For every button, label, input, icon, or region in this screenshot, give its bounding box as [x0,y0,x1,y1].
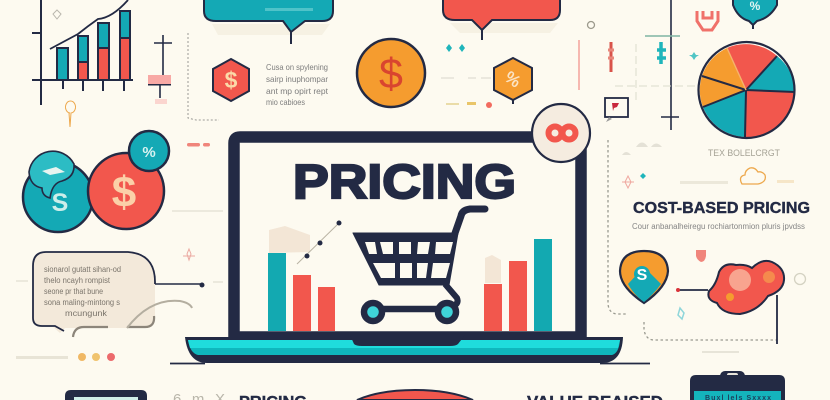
red ellipse: bottom centre [357,390,473,400]
speech bubble: red top [443,0,560,40]
status dots [16,211,223,361]
icon: orange dollar coin [357,39,425,107]
speech note: left panel: sionarol gutatt sihan-od [44,265,121,274]
icon: teal speech circle with dollar [23,151,93,232]
decorative sparkles and dashes near top centre [187,44,492,146]
text block: hexagon caption [266,62,329,107]
icon: cloud [740,168,765,184]
icon: red hexagon dollar: $ [225,67,238,93]
icon: red hexagon dollar [213,59,249,101]
badge: round corner icon [532,104,590,162]
decorative: drop, ring and sparkle [678,250,806,353]
dashed guide near top left [188,33,219,120]
icon: red circle with dollar: $ [112,168,136,217]
icon: orange dollar coin: $ [379,50,403,98]
speech pin: top right teal [733,0,777,29]
text block: hexagon caption: mio cabioes [266,97,305,107]
laptop screen [234,137,581,337]
icon: teal speech circle with dollar: S [52,189,68,217]
pie chart [698,42,795,138]
icon: red blob with connector [676,261,784,344]
icon: small sparkle and bulb [53,10,76,127]
decorative: clouds and sparkles [622,142,794,188]
speech note: left panel: sona maling-mintong s [44,298,120,307]
icon: small teal circle [129,131,169,171]
clipboard: bottom right [690,371,785,400]
icon: orange hexagon percent [494,58,532,104]
text: cost-based caption: Cour anbanalheiregu rochiartonmion pluris jpvdss [632,222,805,231]
speech bubble: teal top [204,0,333,44]
chart: right bars [484,239,552,331]
tablet: bottom left [65,390,147,400]
heading: PRICING: PRICING [293,156,516,209]
icon: message square [605,98,628,122]
icon: shield with dollar: S [637,267,648,284]
laptop [170,104,650,364]
chart: top-left stacked bars [32,0,133,105]
icon: shield with dollar [620,251,668,303]
icon: red circle with dollar [88,153,164,229]
speech note: left panel: thelo ncayh rompist [44,276,111,285]
text block: hexagon caption: Cusa on spylening [266,62,328,72]
dashed connectors right of laptop [608,140,777,340]
marker: cross with pink band [148,35,172,104]
laptop base [170,335,650,364]
decorative icons and rules: upper right [579,0,718,130]
text block: hexagon caption: ant mp opirt rept [266,86,329,96]
chart: left bars [268,220,342,331]
speech note: left panel [33,252,204,337]
icon: orange hexagon percent: % [501,67,524,92]
heading: cost-based pricing: COST-BASED PRICING [633,200,810,217]
icon: shopping cart [353,209,485,321]
icon: small teal circle: % [142,144,156,161]
speech note: left panel: seone pr that bune [44,287,103,296]
pie caption: TEX BOLELCRGT [708,148,780,158]
speech note: left panel: mcungunk [65,309,108,318]
text block: hexagon caption: sairp inuphompar [266,74,328,84]
